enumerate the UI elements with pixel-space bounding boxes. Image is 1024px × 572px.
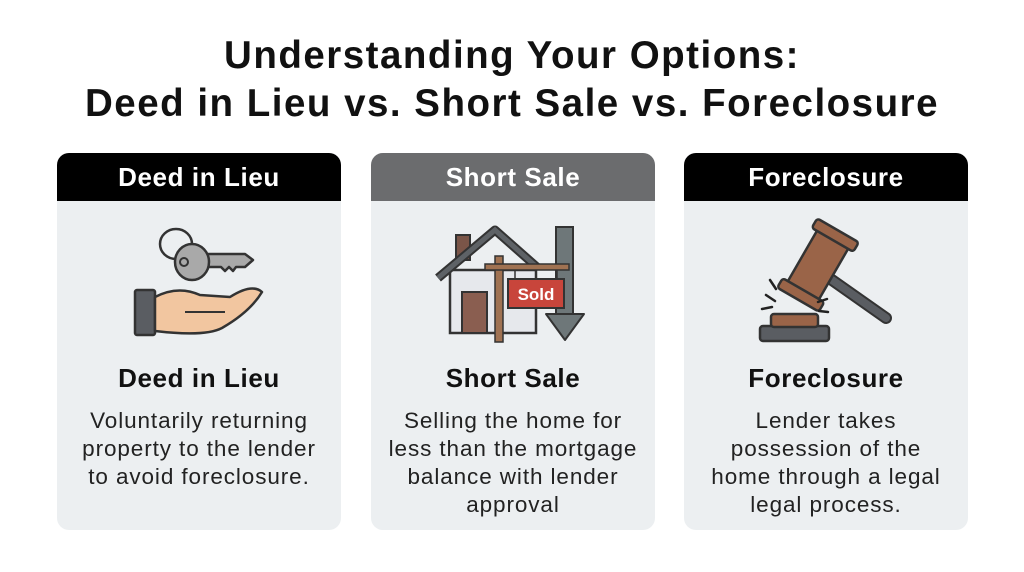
description: Voluntarily returning xyxy=(90,408,308,433)
description: balance with lender xyxy=(408,464,618,489)
panel: foreclosure xyxy=(684,153,968,530)
description: possession of the xyxy=(731,436,921,461)
title: Understanding Your Options: xyxy=(224,34,800,77)
description xyxy=(82,408,316,489)
description: approval xyxy=(466,492,560,517)
description: Selling the home for xyxy=(404,408,622,433)
icon: house with sold sign xyxy=(435,226,585,343)
icon: key and hand xyxy=(134,228,264,336)
description xyxy=(389,408,637,517)
panel: short sale xyxy=(371,153,655,530)
header: deed in lieu: Deed in Lieu xyxy=(118,162,280,192)
header: short sale xyxy=(371,153,655,201)
description: to avoid foreclosure. xyxy=(88,464,310,489)
description: less than the mortgage xyxy=(389,436,637,461)
title xyxy=(85,34,939,125)
description: property to the lender xyxy=(82,436,316,461)
icon: house with sold sign: Sold xyxy=(518,285,554,304)
subtitle: Short Sale xyxy=(446,363,580,393)
header: short sale: Short Sale xyxy=(446,162,580,192)
description: Lender takes xyxy=(756,408,896,433)
panel: deed in lieu xyxy=(57,153,341,530)
description: home through a legal xyxy=(711,464,941,489)
header: foreclosure xyxy=(684,153,968,201)
subtitle: Foreclosure xyxy=(748,363,904,393)
icon: gavel xyxy=(758,218,892,342)
header: deed in lieu xyxy=(57,153,341,201)
description xyxy=(711,408,941,517)
header: foreclosure: Foreclosure xyxy=(748,162,904,192)
subtitle: Deed in Lieu xyxy=(118,363,280,393)
description: legal process. xyxy=(750,492,902,517)
title: Deed in Lieu vs. Short Sale vs. Foreclosure xyxy=(85,82,939,125)
